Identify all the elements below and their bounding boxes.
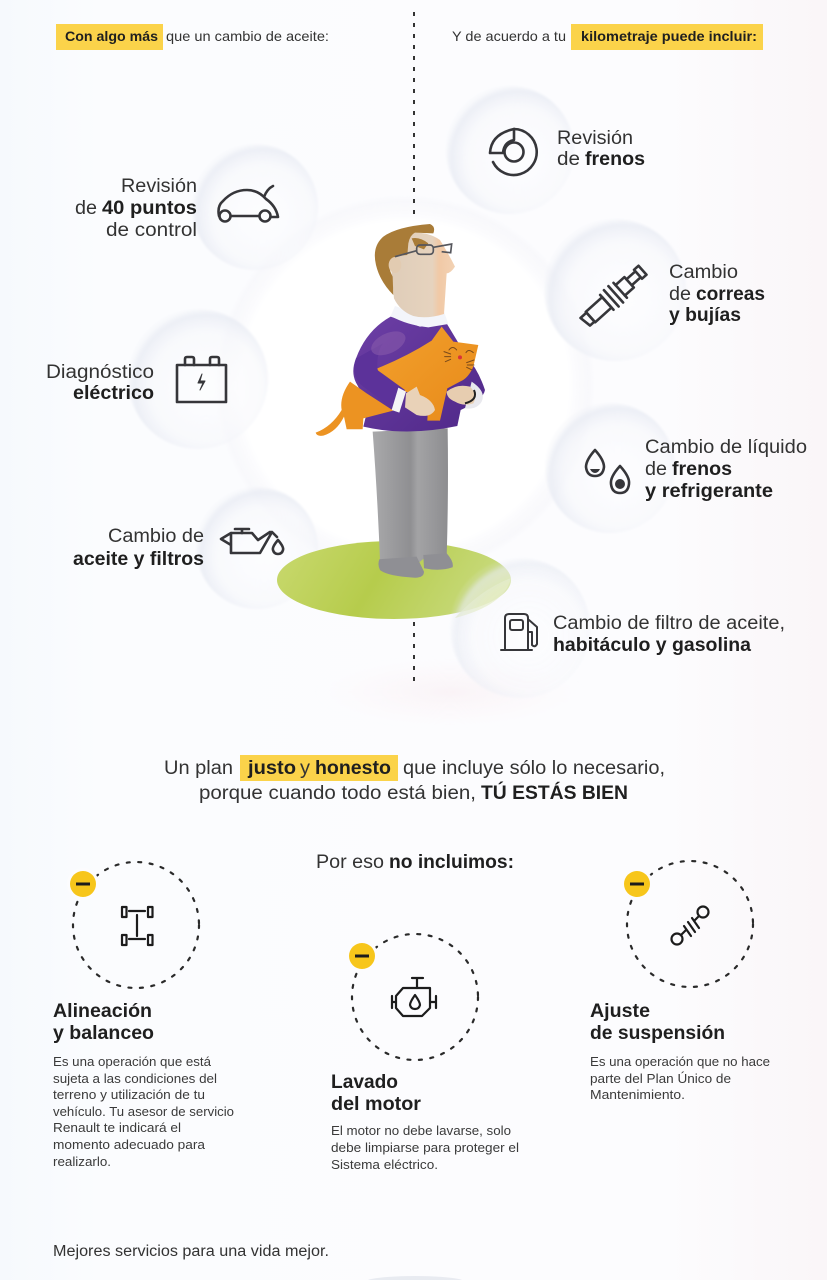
item: líquido de frenos y refrigerante: y refrigerante [645, 481, 773, 502]
subheading: no incluimos: Por eso [316, 852, 384, 873]
shoes [378, 553, 453, 578]
item: revisión de 40 puntos: 40 puntos [102, 198, 197, 219]
subheading: no incluimos: no incluimos: [389, 852, 514, 873]
icon: oil can [221, 529, 283, 554]
excluded: ajuste de suspensión: Ajuste [590, 1001, 650, 1022]
item: revisión de 40 puntos: de control [106, 220, 197, 241]
heading left: Con algo más [65, 28, 158, 44]
left arm sleeve [354, 343, 405, 410]
item: cambio de aceite y filtros [73, 526, 283, 570]
item: revisión de frenos: de [557, 149, 580, 170]
description: Sistema eléctrico. [331, 1157, 438, 1172]
sweater highlight [367, 327, 409, 360]
icon: fluid drops [586, 450, 629, 493]
item: correas y bujías: Cambio [669, 262, 738, 283]
description: Renault te indicará el [53, 1120, 181, 1135]
item: filtros y gasolina [501, 613, 785, 656]
item: cambio de aceite y filtros: aceite y filtros [73, 549, 204, 570]
statement: justo [247, 758, 296, 779]
sweater [353, 317, 485, 431]
heading left [56, 24, 329, 50]
item: filtros y gasolina: Cambio de filtro de aceite, [553, 613, 785, 634]
description: Es una operación que no hace [590, 1054, 770, 1069]
description: vehículo. Tu asesor de servicio [53, 1104, 234, 1119]
statement [164, 755, 665, 804]
item: líquido de frenos y refrigerante: frenos [672, 459, 732, 480]
minus badge [346, 940, 378, 972]
description: terreno y utilización de tu [53, 1087, 205, 1102]
item: diagnóstico eléctrico: Diagnóstico [46, 362, 154, 383]
excluded: ajuste de suspensión [590, 861, 770, 1102]
subheading: no incluimos [316, 852, 514, 873]
trousers [373, 428, 448, 563]
bottom bubble edge [365, 1276, 465, 1280]
left hand [405, 387, 435, 416]
excluded: lavado del motor [331, 934, 519, 1172]
dotted circle [352, 934, 478, 1060]
heading right: kilometraje puede incluir: [581, 28, 757, 44]
description: sujeta a las condiciones del [53, 1071, 217, 1086]
dotted circle [627, 861, 753, 987]
statement: que incluye sólo lo necesario, [403, 758, 665, 779]
right cuff and hand [465, 382, 483, 409]
statement: TÚ ESTÁS BIEN [481, 782, 628, 804]
item: diagnóstico eléctrico: eléctrico [73, 383, 154, 404]
glasses [395, 244, 452, 257]
statement: Un plan [164, 758, 233, 779]
description [331, 1123, 519, 1172]
excluded: lavado del motor: Lavado [331, 1072, 398, 1093]
statement: y [300, 758, 311, 779]
footer line: Mejores servicios para una vida mejor. [53, 1243, 329, 1260]
item: correas y bujías: y bujías [669, 305, 741, 326]
heading right [452, 24, 763, 50]
statement: porque cuando todo está bien, [199, 783, 476, 804]
item: revisión de frenos: frenos [585, 149, 645, 170]
cat face [444, 347, 474, 370]
dotted circle [73, 862, 199, 988]
description: parte del Plan Único de [590, 1071, 731, 1086]
description: El motor no debe lavarse, solo [331, 1123, 511, 1138]
statement: honesto [315, 758, 391, 779]
icon: brake disc [490, 129, 537, 175]
description: realizarlo. [53, 1154, 111, 1169]
ground disc [277, 541, 511, 619]
collar [391, 306, 448, 327]
excluded: alineación y balanceo [53, 862, 234, 1169]
description: momento adecuado para [53, 1137, 206, 1152]
description: Mantenimiento. [590, 1087, 685, 1102]
icon: shock absorber [672, 906, 708, 944]
item: revisión de 40 puntos: Revisión [121, 176, 197, 197]
item: líquido de frenos y refrigerante: Cambio de líquido [645, 437, 807, 458]
heading left: que un cambio de aceite: [166, 28, 329, 44]
eyebrow [412, 238, 428, 249]
icon: battery [177, 357, 226, 402]
item: filtros y gasolina: habitáculo y gasolina [553, 635, 751, 656]
description: debe limpiarse para proteger el [331, 1140, 519, 1155]
icon: engine with drop [392, 978, 436, 1016]
excluded: ajuste de suspensión: de suspensión [590, 1023, 725, 1044]
excluded: lavado del motor: del motor [331, 1094, 422, 1115]
cat rear and tail [316, 382, 393, 436]
description: Es una operación que está [53, 1054, 212, 1069]
icon: fuel pump [501, 614, 537, 650]
heading right: Y de acuerdo a tu [452, 28, 566, 44]
item: diagnóstico eléctrico [46, 357, 226, 404]
item: líquido de frenos y refrigerante [586, 437, 807, 502]
character: man holding cat [316, 224, 485, 578]
excluded: alineación y balanceo: Alineación [53, 1001, 152, 1022]
description [590, 1054, 770, 1102]
left cuff [392, 388, 406, 413]
icon: car with open hood [218, 186, 278, 222]
icon: spark plug [577, 262, 650, 331]
icon: axle alignment [122, 907, 152, 945]
item: revisión de frenos: Revisión [557, 128, 633, 149]
ear [389, 257, 401, 273]
item: cambio de aceite y filtros: Cambio de [108, 526, 204, 547]
excluded: alineación y balanceo: y balanceo [53, 1023, 154, 1044]
item: correas y bujías: de [669, 284, 691, 305]
item: correas y bujías: correas [696, 284, 765, 305]
item: revisión de 40 puntos [75, 176, 278, 241]
head [391, 233, 455, 317]
item: líquido de frenos y refrigerante: de [645, 459, 667, 480]
item: correas y bujías [577, 262, 765, 331]
item: revisión de 40 puntos: de [75, 198, 97, 219]
minus badge [67, 868, 99, 900]
bubble over disc [450, 558, 590, 698]
minus badge [621, 868, 653, 900]
background: soap bubbles [128, 86, 686, 728]
description [53, 1054, 234, 1169]
hair [375, 224, 434, 295]
dotted divider [413, 12, 415, 688]
item: revisión de frenos [490, 128, 645, 175]
cat body [377, 327, 478, 421]
